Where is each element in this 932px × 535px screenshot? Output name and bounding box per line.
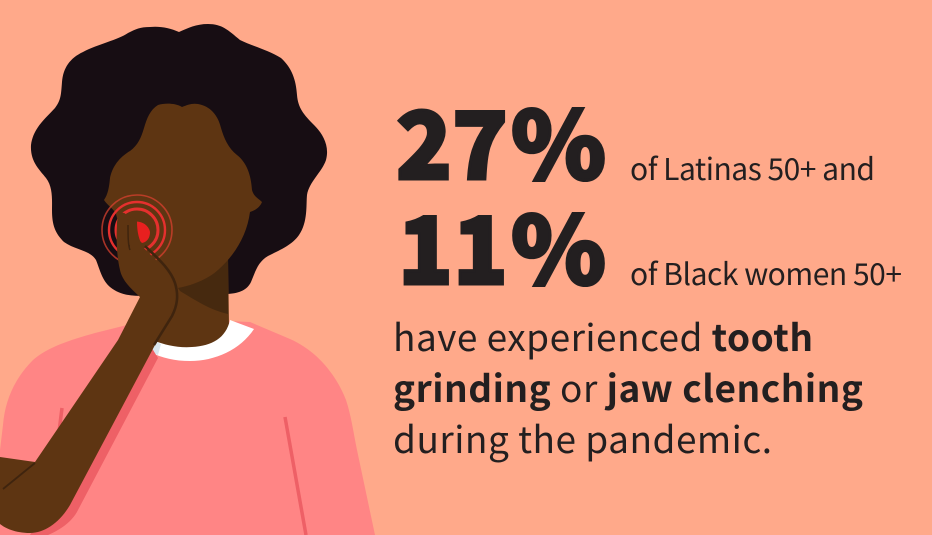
collar [150, 320, 254, 361]
statistic: 27% of Latinas: 27 [396, 71, 508, 206]
collar shade [150, 341, 161, 355]
summary text: grinding or jaw clenching [393, 359, 863, 413]
hand outline shadow [145, 246, 177, 345]
statistic: 11% of Black women: 11 [398, 176, 508, 311]
face [104, 104, 262, 287]
neck [140, 250, 229, 352]
arm shadow on shirt [30, 345, 158, 535]
statistic: 11% of Black women [398, 176, 902, 311]
shirt [0, 318, 375, 535]
shirt fold left [58, 408, 62, 440]
finger gap [128, 225, 130, 250]
pain spot [133, 222, 150, 243]
statistic: 11% of Black women: % [511, 176, 606, 311]
statistic: 27% of Latinas: of Latinas 50+ and [630, 145, 875, 189]
statistic: 27% of Latinas: % [511, 71, 606, 206]
shirt fold right [285, 417, 306, 535]
summary text: during the pandemic. [393, 410, 772, 464]
statistic: 27% of Latinas [396, 71, 875, 206]
forearm and hand [0, 213, 175, 533]
neck shadow [178, 258, 228, 314]
pain rings [102, 195, 172, 265]
summary text [393, 308, 863, 464]
hair [31, 24, 327, 296]
statistic: 11% of Black women: of Black women 50+ [630, 250, 902, 294]
summary text: have experienced tooth [393, 308, 813, 362]
elbow crease [3, 463, 35, 489]
illustration: woman holding her jaw [0, 24, 375, 535]
